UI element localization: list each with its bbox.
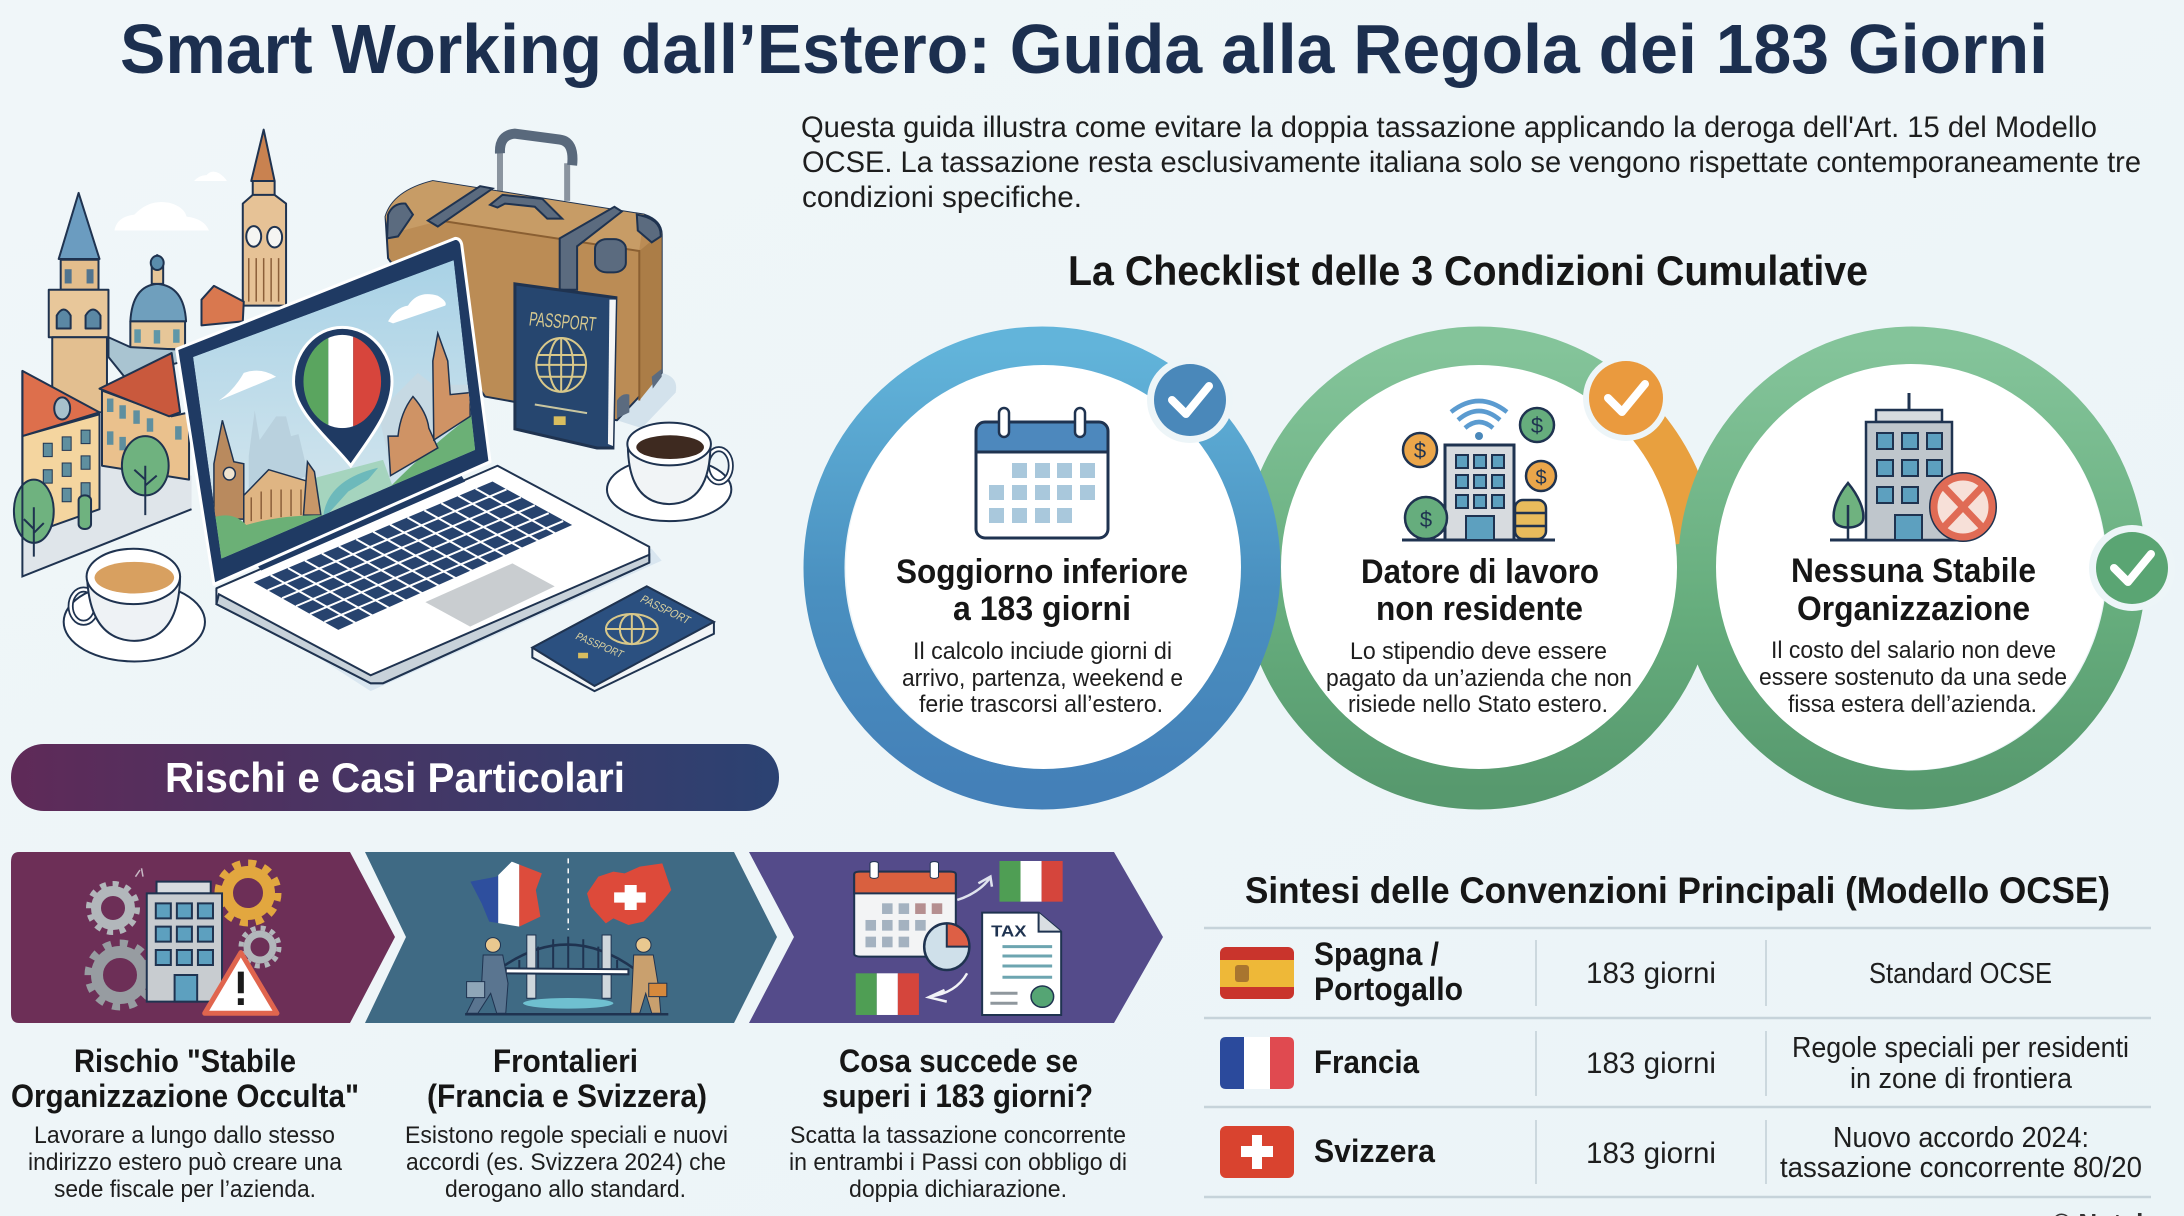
text: condition 3: Nessuna Stabile xyxy=(1791,552,2036,590)
text: over 183 days: doppia dichiarazione. xyxy=(849,1176,1067,1203)
row: Francia: Regole speciali per residenti xyxy=(1792,1032,2129,1064)
text: over 183 days: Cosa succede se xyxy=(839,1043,1078,1079)
icon: building with wifi and coins: $ xyxy=(1414,438,1426,463)
panel: chevron cross-border xyxy=(365,852,777,1023)
icon: building with warning xyxy=(135,868,277,1013)
illustration: flat passport: PASSPORT xyxy=(573,631,626,660)
text: over 183 days: Scatta la tassazione concorrente xyxy=(790,1122,1126,1149)
row: Svizzera: tassazione concorrente 80/20 xyxy=(1780,1152,2142,1184)
intro text block: condizioni specifiche. xyxy=(802,181,1082,214)
text: over 183 days xyxy=(789,1043,1127,1203)
row: Svizzera: Svizzera xyxy=(1314,1133,1435,1169)
row: Svizzera xyxy=(1220,1122,2142,1184)
text: condition 2: Datore di lavoro xyxy=(1361,553,1599,591)
text: condition 3: Organizzazione xyxy=(1797,590,2030,628)
text: over 183 days: superi i 183 giorni? xyxy=(822,1078,1093,1114)
check badge: condition 3 xyxy=(2089,525,2175,611)
panel: condition 1 ring xyxy=(824,347,1260,789)
text: frontalieri: Frontalieri xyxy=(493,1043,638,1079)
text: condition 1: Il calcolo inciude giorni di xyxy=(913,638,1172,665)
text: over 183 days: in entrambi i Passi con obbligo di xyxy=(789,1149,1127,1176)
text: frontalieri: (Francia e Svizzera) xyxy=(427,1078,707,1114)
illustration: coffee cup right xyxy=(607,423,731,521)
icon: flags of France and Switzerland with bridge xyxy=(465,858,671,1014)
text: frontalieri: derogano allo standard. xyxy=(445,1176,686,1203)
text: frontalieri: Esistono regole speciali e nuovi xyxy=(405,1122,728,1149)
text: condition 3 xyxy=(1759,552,2067,718)
icon: building with wifi and coins: $ xyxy=(1531,413,1543,438)
row: Svizzera: 183 giorni xyxy=(1586,1137,1716,1170)
row: Francia: 183 giorni xyxy=(1586,1047,1716,1080)
text: risk stabile organizzazione: Organizzazione Occulta" xyxy=(11,1078,359,1114)
icon: building with prohibition sign xyxy=(1830,393,1996,541)
icon: gears xyxy=(88,863,279,1007)
illustration: coffee cup left xyxy=(64,549,205,661)
text: condition 2: non residente xyxy=(1376,590,1583,628)
illustration: European city skyline xyxy=(14,130,286,576)
text: condition 2: Lo stipendio deve essere xyxy=(1350,638,1607,665)
table heading: Sintesi delle Convenzioni Principali (Modello OCSE) xyxy=(1245,870,2110,911)
intro text block xyxy=(801,111,2141,214)
text: risk stabile organizzazione xyxy=(11,1043,359,1203)
text: risk stabile organizzazione: indirizzo estero può creare una xyxy=(28,1149,343,1176)
icon: building with wifi and coins: $ xyxy=(1420,507,1432,532)
text: condition 3: fissa estera dell’azienda. xyxy=(1788,691,2037,718)
icon: calendar xyxy=(975,408,1109,538)
illustration: upright passport: PASSPORT xyxy=(528,308,598,335)
row: Svizzera: Nuovo accordo 2024: xyxy=(1833,1122,2089,1154)
icon: calendar, clock, flags and tax form: TAX xyxy=(991,923,1027,940)
text: condition 2: risiede nello Stato estero. xyxy=(1348,691,1608,718)
panel: chevron over 183 days xyxy=(749,852,1163,1023)
panel: chevron risk xyxy=(11,852,395,1023)
text: condition 1: ferie trascorsi all’estero. xyxy=(919,691,1163,718)
illustration: flat passport: PASSPORT xyxy=(638,593,694,627)
text: condition 3: essere sostenuto da una sede xyxy=(1759,664,2067,691)
illustration: upright passport xyxy=(515,284,616,448)
illustration: flat passport xyxy=(532,586,714,691)
row: Francia: in zone di frontiera xyxy=(1850,1063,2073,1095)
text: condition 2 xyxy=(1326,553,1632,718)
illustration: laptop, city, suitcase, passports and coffee xyxy=(14,130,731,691)
illustration: laptop xyxy=(177,238,662,691)
illustration: suitcase xyxy=(386,134,676,428)
row: Spagna / Portogallo: Portogallo xyxy=(1314,971,1463,1007)
check badge: condition 1 xyxy=(1147,357,1233,443)
text: condition 1 xyxy=(896,553,1188,718)
text: condition 3: Il costo del salario non deve xyxy=(1771,637,2056,664)
text: risk stabile organizzazione: Lavorare a lungo dallo stesso xyxy=(34,1122,335,1149)
text: condition 1: Soggiorno inferiore xyxy=(896,553,1188,591)
check badge: condition 2 xyxy=(1583,355,1669,441)
icon: building with wifi and coins xyxy=(1402,401,1556,540)
panel: condition 2 ring xyxy=(1261,347,1697,789)
row: Francia: Francia xyxy=(1314,1044,1419,1080)
table: conventions summary xyxy=(1204,870,2151,1197)
banner: risks heading xyxy=(11,744,779,811)
intro text block: Questa guida illustra come evitare la doppia tassazione applicando la deroga dell'Art. 15 del Modello xyxy=(801,111,2097,144)
row: Francia xyxy=(1220,1032,2129,1095)
text: frontalieri xyxy=(405,1043,728,1203)
row: Spagna / Portogallo: Standard OCSE xyxy=(1869,958,2052,990)
row: Spagna / Portogallo: 183 giorni xyxy=(1586,957,1716,990)
text: condition 2: pagato da un’azienda che non xyxy=(1326,665,1632,692)
panel: condition 3 ring xyxy=(1698,346,2126,790)
location pin with Italian flag xyxy=(294,327,392,466)
text: frontalieri: accordi (es. Svizzera 2024) che xyxy=(406,1149,726,1176)
text: risk stabile organizzazione: sede fiscale per l’azienda. xyxy=(54,1176,316,1203)
laptop screen with landscape xyxy=(193,260,478,563)
row: Spagna / Portogallo xyxy=(1220,936,2052,1007)
icon: calendar, clock, flags and tax form xyxy=(854,861,1063,1015)
text: risk stabile organizzazione: Rischio "Stabile xyxy=(74,1043,296,1079)
banner: risks heading: Rischi e Casi Particolari xyxy=(165,754,625,801)
intro text block: OCSE. La tassazione resta esclusivamente italiana solo se vengono rispettate contemporaneamente tre xyxy=(802,146,2141,179)
text: condition 1: arrivo, partenza, weekend e xyxy=(902,665,1183,692)
text: condition 1: a 183 giorni xyxy=(953,590,1131,628)
section heading: checklist: La Checklist delle 3 Condizioni Cumulative xyxy=(1068,247,1868,294)
row: Spagna / Portogallo: Spagna / xyxy=(1314,936,1439,972)
title: Smart Working dall’Estero: Guida alla Regola dei 183 Giorni xyxy=(120,10,2048,88)
icon: building with wifi and coins: $ xyxy=(1535,467,1547,489)
